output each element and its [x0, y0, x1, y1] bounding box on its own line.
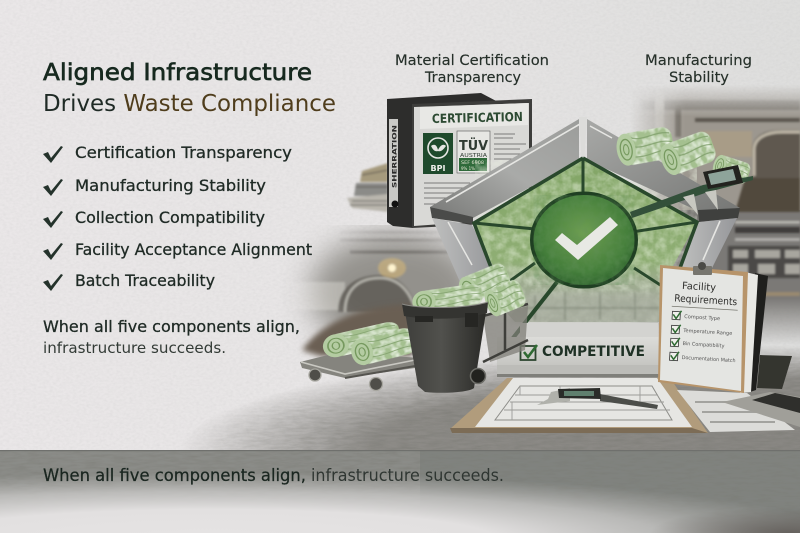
icon: clip: [693, 262, 712, 275]
side paper: [677, 390, 795, 432]
document with caliper: [450, 378, 708, 433]
item: certification transparency: Certification Transparency: [75, 143, 292, 162]
icon: BPI badge: [423, 133, 453, 174]
pipes background left: [294, 225, 460, 355]
item: documentation match: Documentation Match: [681, 355, 736, 364]
icon: caliper tool: [537, 388, 658, 409]
item: temperature range: Temperature Range: [682, 328, 732, 337]
label: manufacturing stability: Stability: [669, 70, 729, 86]
text: clipboard list: Facility: [682, 281, 716, 294]
title: [43, 60, 336, 117]
document stack: [347, 163, 388, 212]
label: material certification transparency: [395, 53, 549, 86]
center disc: [530, 192, 638, 288]
item: bin compatibility: Bin Compatibility: [682, 341, 725, 350]
title: Aligned Infrastructure: [43, 60, 312, 86]
item: compost type: Compost Type: [684, 314, 720, 322]
icon: TUV Austria badge: TÜV: [459, 138, 488, 154]
icon: competitive checkbox: [520, 345, 537, 360]
dirt mound: [302, 304, 412, 356]
footer statement: infrastructure succeeds.: [311, 466, 504, 485]
binder: certification: [347, 93, 532, 228]
competitive plaque: [497, 323, 659, 377]
caliper upper: [630, 165, 753, 218]
rolls over bin: [411, 261, 528, 362]
pentagon frame: [430, 117, 740, 352]
lead lines: [474, 158, 697, 352]
ground surface: [190, 348, 800, 450]
heading: certification label: CERTIFICATION: [432, 109, 523, 126]
left side bevel: [432, 218, 495, 282]
label: competitive: COMPETITIVE: [542, 344, 645, 360]
footer statement: [43, 466, 504, 485]
text: clipboard list: Requirements: [674, 293, 737, 308]
summary text: infrastructure succeeds.: [43, 339, 226, 357]
heading: certification label: [420, 103, 528, 129]
item: collection compatibility: Collection Compatibility: [75, 208, 265, 227]
glass panels: [475, 160, 697, 322]
text: clipboard list: [668, 280, 740, 364]
summary text: When all five components align,: [43, 317, 300, 336]
top right bevel: [587, 119, 740, 211]
icon: TUV Austria badge: 9% 1%: [461, 166, 476, 172]
item: facility acceptance alignment: Facility Acceptance Alignment: [75, 240, 312, 259]
label: manufacturing stability: [645, 53, 752, 86]
cart with rolls left: [300, 320, 420, 390]
item: batch traceability: Batch Traceability: [75, 271, 215, 290]
top left bevel: [430, 119, 579, 218]
footer statement: When all five components align,: [43, 466, 306, 485]
laptop: [722, 355, 800, 427]
right side bevel: [680, 218, 737, 268]
waste bin: [402, 302, 488, 393]
bottom band: [0, 450, 800, 533]
checklist: [43, 143, 312, 291]
clipboard: facility requirements: [658, 262, 768, 393]
label: manufacturing stability: Manufacturing: [645, 53, 752, 69]
binder: certification: SHERRATION: [390, 125, 398, 188]
label: material certification transparency: Material Certification: [395, 53, 549, 69]
icon: TUV Austria badge: SEF 6908: [461, 160, 484, 166]
icon: BPI badge: BPI: [431, 164, 445, 173]
icon: TUV Austria badge: [457, 131, 490, 173]
rolls on shelf right: [614, 126, 752, 185]
factory background right: [630, 85, 800, 345]
icon: TUV Austria badge: AUSTRIA: [460, 153, 488, 159]
icon: check mark: [555, 217, 618, 260]
item: manufacturing stability: Manufacturing Stability: [75, 176, 266, 195]
apex divider: [579, 117, 587, 165]
title: Drives Waste Compliance: [43, 91, 336, 117]
summary text: [43, 317, 300, 357]
label: material certification transparency: Transparency: [424, 70, 521, 86]
